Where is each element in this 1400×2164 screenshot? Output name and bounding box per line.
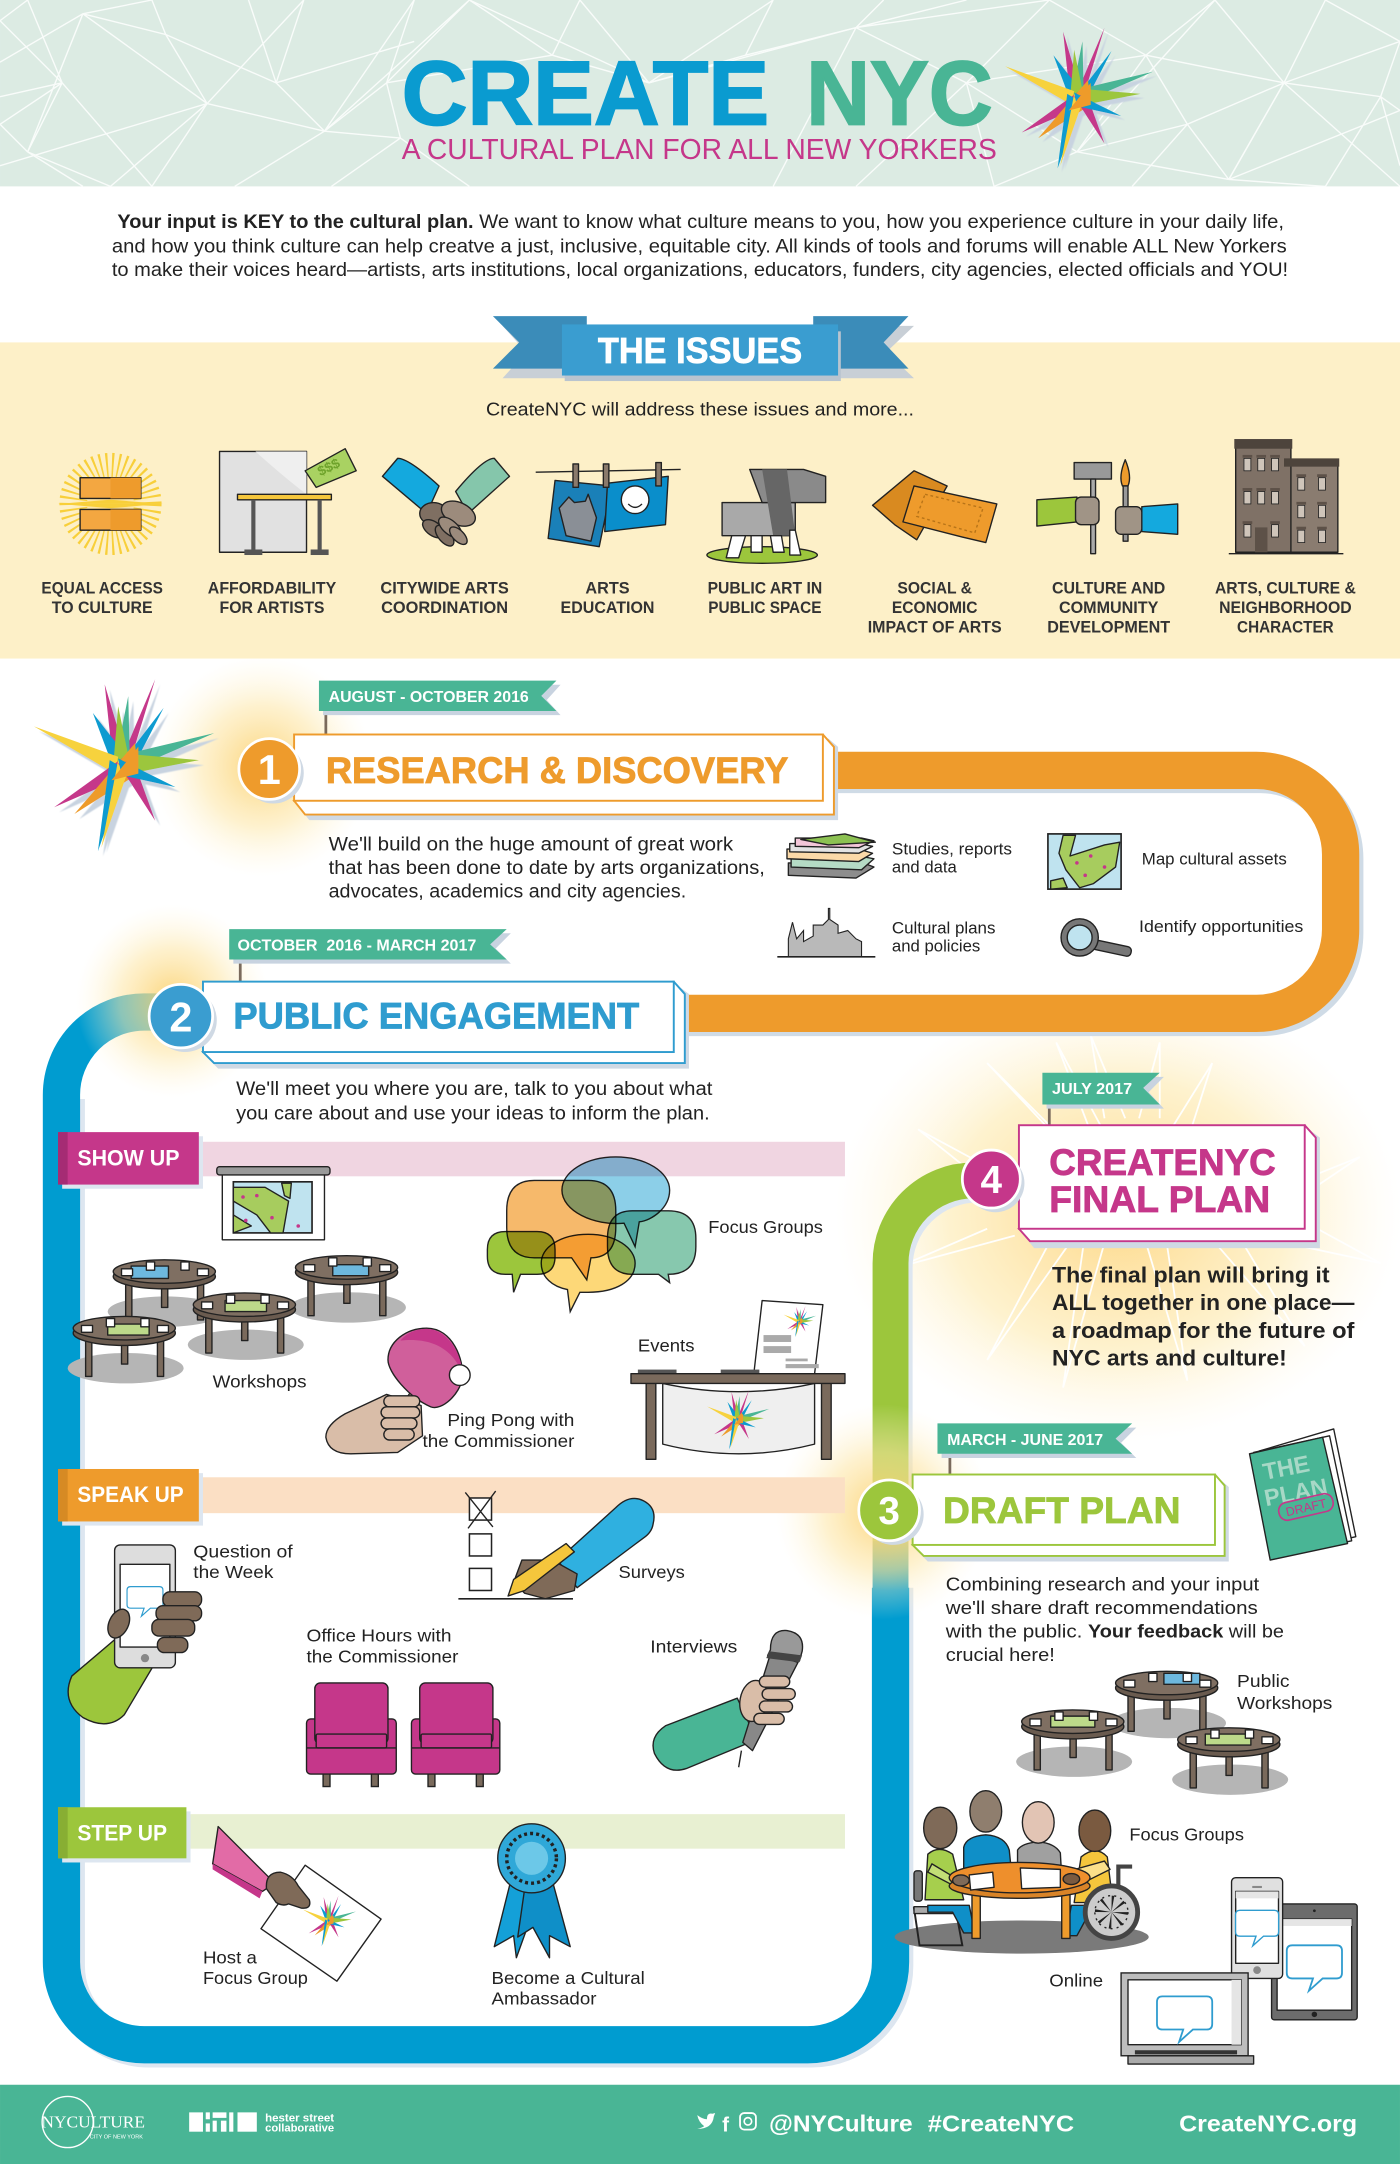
icon: phone in hand — [68, 1545, 202, 1724]
icon: focus group people — [895, 1791, 1149, 1954]
label — [307, 1626, 458, 1666]
icon: phone — [1232, 1878, 1283, 1978]
subtitle: A CULTURAL PLAN FOR ALL NEW YORKERS — [402, 134, 997, 166]
number 2 — [149, 984, 217, 1052]
label — [422, 1410, 574, 1451]
heading box: FINAL PLAN — [1049, 1178, 1270, 1220]
icon: affordability: $$$ — [315, 455, 343, 479]
date tag: MARCH - JUNE 2017 — [947, 1432, 1103, 1449]
label: Map cultural assets — [1142, 849, 1287, 868]
label: COMMUNITY — [1059, 598, 1158, 617]
icon: focus group bubbles — [487, 1157, 696, 1312]
step 3: draft plan — [859, 1423, 1357, 2064]
number 3: 3 — [878, 1490, 900, 1533]
heading box: RESEARCH & DISCOVERY — [326, 749, 788, 791]
label: NEIGHBORHOOD — [1219, 598, 1352, 617]
step 2: public engagement — [58, 929, 845, 2009]
heading box: DRAFT PLAN — [943, 1489, 1180, 1531]
glow: final plan — [835, 987, 1400, 1443]
label: and policies — [892, 936, 980, 955]
label: Become a Cultural — [492, 1968, 645, 1988]
glow: step 2 — [76, 904, 269, 1098]
icon: title star — [1005, 28, 1153, 168]
description: Your feedback — [1088, 1620, 1224, 1641]
icon: arts education — [536, 463, 681, 547]
label: Focus Groups — [1129, 1824, 1244, 1844]
path: blue track — [61, 1012, 895, 2049]
title — [402, 43, 993, 144]
number 2: 2 — [169, 994, 192, 1040]
path: orange track — [138, 770, 1345, 1018]
label: COORDINATION — [381, 598, 508, 617]
icon: culture and community development — [1037, 460, 1178, 554]
label: Host a — [203, 1947, 257, 1967]
label: Ambassador — [492, 1989, 596, 2009]
label: Office Hours with — [307, 1626, 451, 1646]
band: step up: STEP UP — [77, 1820, 167, 1845]
number 4: 4 — [981, 1159, 1003, 1202]
band: step up — [58, 1807, 845, 1862]
icon: public art — [707, 469, 826, 563]
panel: header — [0, 0, 1400, 186]
number 3 — [859, 1480, 924, 1545]
heading box — [203, 982, 689, 1069]
description: Combining research and your input — [946, 1573, 1260, 1594]
icon: armchairs — [307, 1683, 500, 1787]
intro text: Your input is KEY to the cultural plan. — [117, 212, 474, 233]
date tag — [319, 681, 561, 736]
icon: laptop — [1121, 1973, 1254, 2064]
panel: the issues — [0, 316, 1400, 659]
label: PUBLIC SPACE — [708, 598, 821, 617]
logo: nyc culture: NYCULTURE — [41, 2113, 145, 2132]
label: ECONOMIC — [892, 598, 978, 617]
intro text: and how you think culture can help creatve a just, inclusive, equitable city. All kinds of tools and forums will enable ALL New Yorkers — [112, 237, 1287, 258]
date tag: AUGUST - OCTOBER 2016 — [329, 689, 529, 706]
icon: the plan book: PLAN — [1262, 1473, 1330, 1511]
issues subtitle: CreateNYC will address these issues and more... — [486, 399, 914, 420]
label — [492, 1968, 645, 2009]
glow: step 3 — [776, 1404, 991, 1619]
label: EQUAL ACCESS — [41, 579, 163, 598]
icon: books — [787, 834, 875, 878]
label: AFFORDABILITY — [208, 579, 336, 598]
band: speak up: SPEAK UP — [77, 1482, 184, 1507]
icon: skyline — [777, 908, 875, 957]
label: PUBLIC ART IN — [708, 579, 822, 598]
label: Workshops — [213, 1372, 307, 1392]
icon: magnifier — [1061, 919, 1132, 957]
intro text: We want to know what culture means to you, how you experience culture in your daily life, — [479, 212, 1284, 233]
glow: step 1 — [152, 656, 373, 877]
step 1: research and discovery — [239, 681, 1303, 957]
title: NYC — [806, 43, 993, 144]
panel: footer — [0, 2085, 1400, 2164]
icon: the plan book: THE — [1261, 1450, 1312, 1485]
icon: workshop tables — [68, 1256, 406, 1383]
label: Focus Groups — [708, 1217, 823, 1237]
heading box: CREATENYC — [1049, 1141, 1276, 1183]
icon: citywide arts coordination — [382, 458, 509, 549]
label: Online — [1049, 1971, 1103, 1991]
date tag: OCTOBER 2016 - MARCH 2017 — [237, 938, 477, 955]
icon: tickets — [873, 471, 997, 543]
icons: social media — [697, 2113, 756, 2137]
description: you care about and use your ideas to inform the plan. — [236, 1103, 710, 1125]
description: that has been done to date by arts organizations, — [329, 857, 765, 879]
label: IMPACT OF ARTS — [868, 617, 1002, 636]
description — [945, 1573, 1284, 1665]
label — [892, 840, 1012, 877]
label: Public — [1237, 1671, 1290, 1691]
label: Focus Group — [203, 1968, 308, 1988]
description: We'll meet you where you are, talk to you about what — [236, 1078, 713, 1100]
icon: starting star — [34, 679, 214, 851]
description: crucial here! — [946, 1644, 1055, 1665]
band: show up — [58, 1132, 845, 1189]
label: CULTURE AND — [1052, 579, 1165, 598]
heading box — [1019, 1125, 1320, 1248]
label: Events — [638, 1336, 695, 1356]
label: Interviews — [650, 1637, 737, 1657]
number 4 — [962, 1150, 1024, 1212]
number 1: 1 — [258, 747, 281, 793]
label: Surveys — [619, 1562, 685, 1582]
heading box — [913, 1475, 1229, 1561]
step 4: final plan — [962, 1073, 1355, 1370]
description — [236, 1078, 713, 1125]
logo: hester street collaborative — [189, 2112, 334, 2135]
label — [193, 1541, 294, 1582]
final plan text: a roadmap for the future of — [1052, 1318, 1355, 1343]
label: TO CULTURE — [52, 598, 153, 617]
date tag: JULY 2017 — [1052, 1081, 1132, 1098]
label: ARTS, CULTURE & — [1215, 579, 1356, 598]
band: speak up — [58, 1469, 845, 1526]
label: the Commissioner — [307, 1646, 458, 1666]
icon: host a focus group — [213, 1827, 381, 1981]
icon: tablet — [1272, 1904, 1357, 2020]
icon: equal access — [58, 454, 163, 554]
logo: nyc culture — [41, 2096, 145, 2148]
label: the Week — [193, 1562, 273, 1582]
icon: the plan book — [1249, 1429, 1356, 1560]
description: we'll share draft recommendations — [945, 1597, 1258, 1618]
description: We'll build on the huge amount of great work — [329, 833, 733, 855]
intro text — [112, 212, 1288, 281]
label: ARTS — [585, 579, 630, 598]
label: FOR ARTISTS — [220, 598, 324, 617]
final plan text: NYC arts and culture! — [1052, 1345, 1287, 1370]
final plan text: ALL together in one place— — [1052, 1290, 1355, 1315]
icon: projector map — [217, 1167, 330, 1240]
band: show up: SHOW UP — [77, 1145, 180, 1170]
label: Cultural plans — [892, 918, 995, 937]
label: SOCIAL & — [897, 579, 972, 598]
label — [892, 918, 995, 955]
label: Question of — [193, 1541, 294, 1561]
label: CHARACTER — [1237, 617, 1334, 636]
label: and data — [892, 858, 957, 877]
heading box — [294, 734, 838, 820]
path: green track — [873, 1180, 980, 1590]
social handle: @NYCulture — [769, 2111, 913, 2137]
label: Ping Pong with — [447, 1410, 574, 1430]
label: Identify opportunities — [1139, 917, 1303, 936]
icon: neighborhood building — [1229, 439, 1343, 554]
logo: hester street collaborative: collaborative — [265, 2123, 334, 2135]
date tag — [229, 929, 511, 983]
heading box: PUBLIC ENGAGEMENT — [233, 995, 639, 1037]
icon: ping pong — [326, 1328, 470, 1454]
label: CITYWIDE ARTS — [380, 579, 509, 598]
icon: ribbon — [494, 1824, 570, 1958]
icon: events table — [631, 1301, 845, 1459]
final plan text — [1052, 1263, 1355, 1370]
logo: nyc culture: CITY OF NEW YORK — [90, 2135, 143, 2141]
title: CREATE — [402, 43, 769, 144]
description: with the public. — [945, 1620, 1082, 1641]
icon: survey — [458, 1491, 654, 1599]
label — [203, 1947, 308, 1988]
number 1 — [239, 739, 304, 804]
icon: affordability — [220, 449, 356, 555]
banner: the issues: THE ISSUES — [598, 331, 802, 371]
description: advocates, academics and city agencies. — [329, 880, 686, 902]
description: will be — [1228, 1620, 1284, 1641]
icon: public workshops tables — [1016, 1671, 1288, 1795]
icon: the plan book: DRAFT — [1284, 1496, 1328, 1519]
description — [329, 833, 765, 902]
label: the Commissioner — [422, 1431, 574, 1451]
website: CreateNYC.org — [1179, 2111, 1357, 2137]
date tag — [1042, 1073, 1164, 1127]
label: DEVELOPMENT — [1047, 617, 1170, 636]
banner: the issues — [493, 316, 914, 381]
icon: microphone — [653, 1630, 803, 1770]
logo: hester street collaborative: hester street — [265, 2112, 334, 2124]
label: Studies, reports — [892, 840, 1012, 859]
label — [1237, 1671, 1332, 1713]
label: Workshops — [1237, 1693, 1332, 1713]
intro text: to make their voices heard—artists, arts institutions, local organizations, educators, funders, city agencies, elected officials and YOU! — [112, 260, 1288, 281]
icons: social media: f — [722, 2114, 729, 2137]
label: EDUCATION — [561, 598, 654, 617]
hashtag: #CreateNYC — [928, 2111, 1074, 2137]
date tag — [937, 1423, 1136, 1476]
icon: map — [1048, 834, 1121, 889]
final plan text: The final plan will bring it — [1052, 1263, 1330, 1288]
